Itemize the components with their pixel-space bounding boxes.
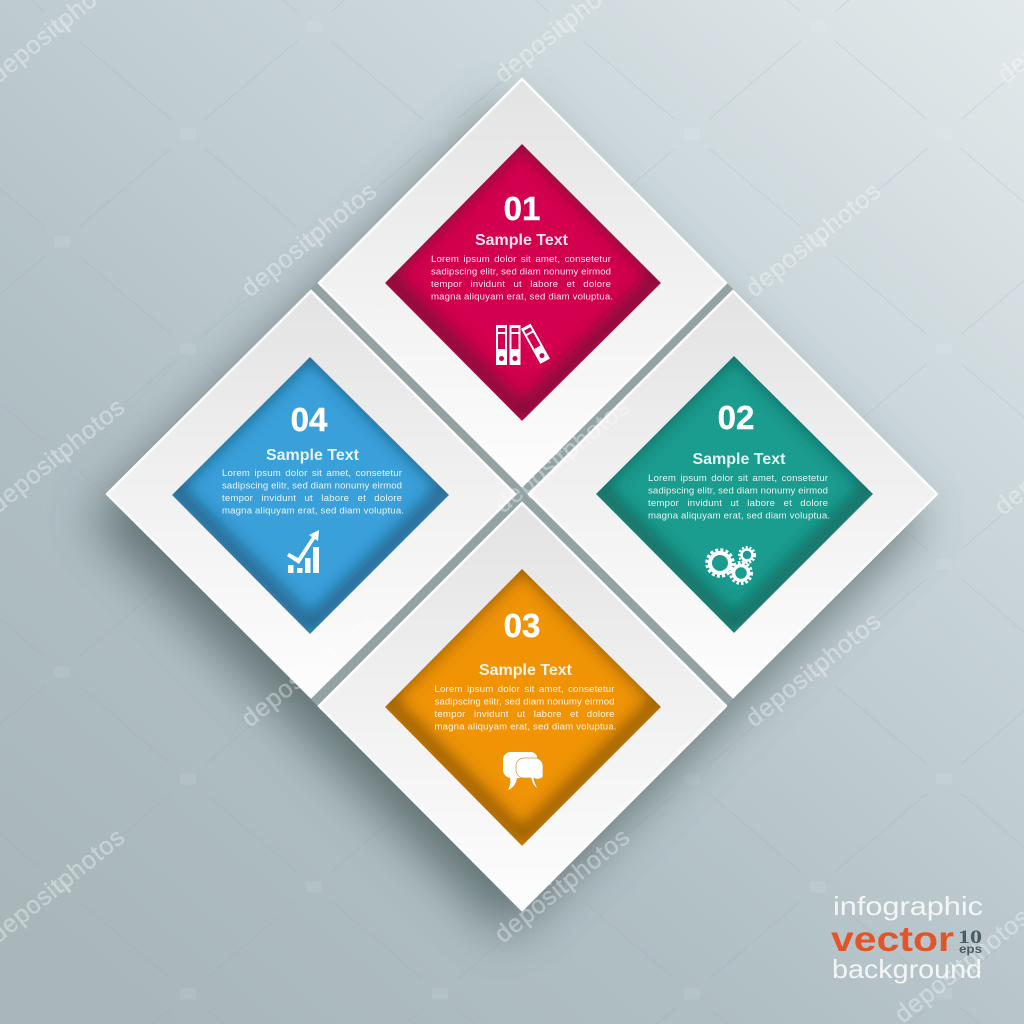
number 02: 02 (718, 399, 754, 436)
body 04: magna aliquyam erat, sed diam voluptua. (222, 506, 404, 516)
body 03: magna aliquyam erat, sed diam voluptua. (434, 722, 616, 732)
icon: gears (707, 547, 755, 584)
background word: background (832, 954, 982, 984)
panel 02: teal diamond (529, 291, 937, 697)
window 01 (385, 136, 661, 421)
body 04: tempor invidunt ut labore et dolore (222, 493, 402, 504)
watermarks over the panels: depositphotos (489, 823, 635, 949)
body 01: magna aliquyam erat, sed diam voluptua. (431, 292, 613, 302)
number 04: 04 (291, 401, 328, 438)
body 03 (434, 684, 616, 732)
icon: rising bar chart (287, 530, 319, 573)
icon: speech bubbles (503, 752, 543, 790)
title 01: Sample Text (475, 232, 568, 249)
watermarks over the panels: depositphotos (740, 607, 886, 733)
body 02 (648, 473, 830, 522)
body 01 (431, 254, 613, 302)
drop shadow of the diamond group (90, 104, 922, 937)
frame 04 (107, 291, 515, 697)
body 03: Lorem ipsum dolor sit amet, consetetur (434, 684, 615, 695)
frame 03 (319, 503, 726, 910)
number 01: 01 (504, 190, 540, 227)
icon: binders (496, 324, 550, 365)
number 03: 03 (504, 607, 540, 644)
frame 01 (319, 79, 726, 486)
body 04: sadipscing elitr, sed diam nonumy eirmod (222, 480, 402, 492)
frame 02 (529, 291, 937, 697)
watermarks over the panels: depositphotos (740, 177, 886, 303)
10 eps badge: eps (959, 942, 982, 956)
watermarks over the panels: depositphotos (236, 177, 382, 303)
panel 03: orange diamond (319, 503, 726, 910)
watermarks over the panels: depositphotos (236, 607, 382, 733)
10 eps badge: 10 (958, 927, 982, 948)
window 02 (596, 348, 873, 633)
watermarks over the panels: depositphotos (489, 393, 635, 519)
body 02: sadipscing elitr, sed diam nonumy eirmod (648, 486, 828, 496)
body 02: Lorem ipsum dolor sit amet, consetetur (648, 473, 829, 484)
body 03: tempor invidunt ut labore et dolore (434, 709, 614, 720)
watermarks over the panels (236, 177, 886, 949)
title 04: Sample Text (266, 447, 359, 464)
window 03 (385, 561, 661, 846)
body 01: tempor invidunt ut labore et dolore (431, 279, 611, 290)
panel 01: magenta diamond (319, 79, 726, 486)
body 02: magna aliquyam erat, sed diam voluptua. (648, 510, 830, 522)
infographic word: infographic (833, 891, 983, 921)
gaps between frames (106, 78, 938, 911)
vector word: vector (831, 920, 954, 959)
body 02: tempor invidunt ut labore et dolore (648, 498, 828, 509)
body 04 (222, 468, 404, 516)
title 03: Sample Text (479, 662, 572, 679)
10 eps badge (958, 927, 982, 956)
body 04: Lorem ipsum dolor sit amet, consetetur (222, 468, 403, 479)
window 04 (172, 349, 449, 634)
body 03: sadipscing elitr, sed diam nonumy eirmod (434, 696, 614, 708)
title 02: Sample Text (692, 451, 786, 468)
body 01: Lorem ipsum dolor sit amet, consetetur (431, 254, 612, 265)
body 01: sadipscing elitr, sed diam nonumy eirmod (431, 266, 611, 278)
logo text block (831, 891, 983, 984)
panel 04: blue diamond (107, 291, 515, 697)
